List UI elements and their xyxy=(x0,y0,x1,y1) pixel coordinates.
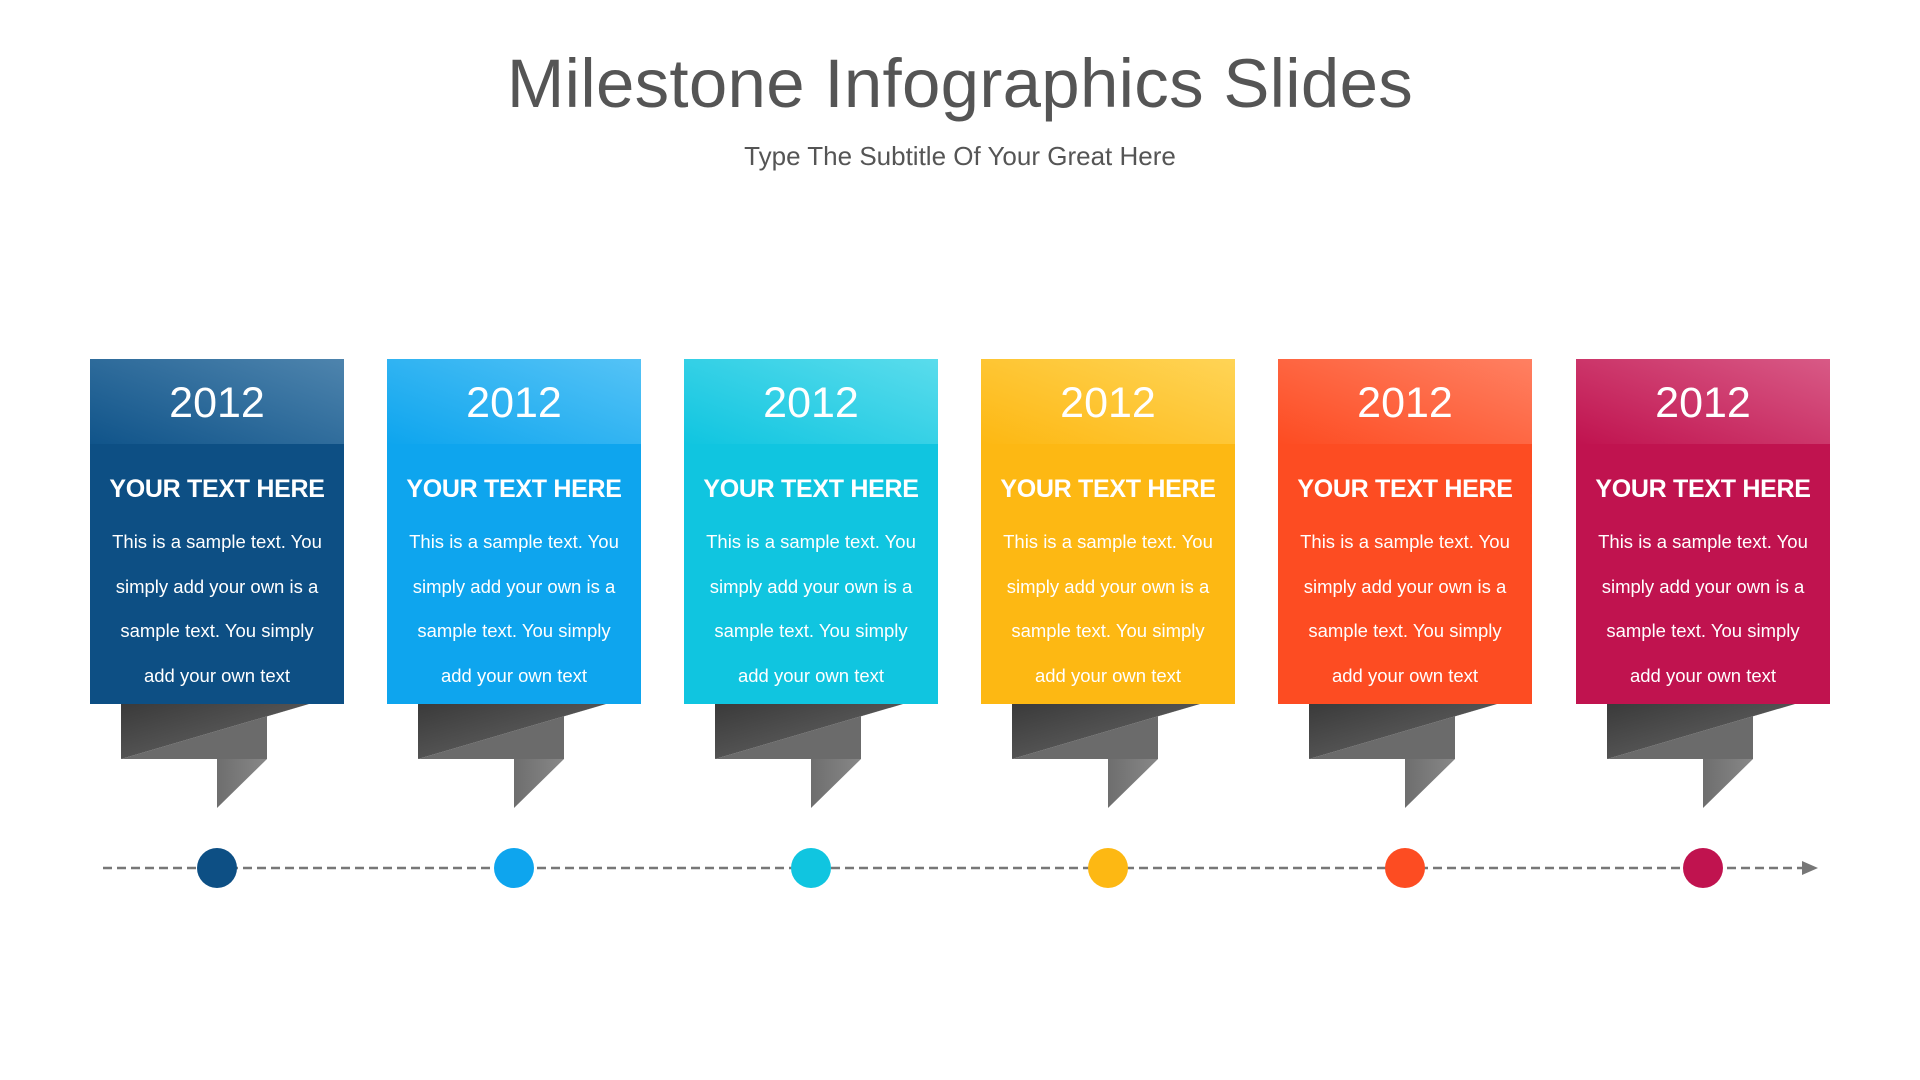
card 2 xyxy=(387,359,641,704)
card 6 xyxy=(1576,359,1830,704)
card 1 xyxy=(90,359,344,704)
card 5: simply add your own is a xyxy=(1304,576,1506,597)
subtitle: Type The Subtitle Of Your Great Here xyxy=(744,141,1176,171)
card 5: 2012 xyxy=(1357,379,1453,427)
card 3: add your own text xyxy=(738,665,884,686)
card 5: YOUR TEXT HERE xyxy=(1297,475,1513,503)
card 3: 2012 xyxy=(763,379,859,427)
card 1: YOUR TEXT HERE xyxy=(109,475,325,503)
card 1: sample text. You simply xyxy=(120,620,314,641)
card 2: sample text. You simply xyxy=(417,620,611,641)
card 4: 2012 xyxy=(1060,379,1156,427)
card 2: simply add your own is a xyxy=(413,576,615,597)
card 5: add your own text xyxy=(1332,665,1478,686)
card 6: YOUR TEXT HERE xyxy=(1595,475,1811,503)
card 3: simply add your own is a xyxy=(710,576,912,597)
card 3: sample text. You simply xyxy=(714,620,908,641)
card 6: This is a sample text. You xyxy=(1598,531,1808,552)
card 4 xyxy=(981,359,1235,704)
card 2: 2012 xyxy=(466,379,562,427)
card 4: add your own text xyxy=(1035,665,1181,686)
card 2: YOUR TEXT HERE xyxy=(406,475,622,503)
title: Milestone Infographics Slides xyxy=(507,45,1413,122)
card 5: This is a sample text. You xyxy=(1300,531,1510,552)
card 6: add your own text xyxy=(1630,665,1776,686)
card 4: simply add your own is a xyxy=(1007,576,1209,597)
card 1: simply add your own is a xyxy=(116,576,318,597)
card 4: sample text. You simply xyxy=(1011,620,1205,641)
card 3: YOUR TEXT HERE xyxy=(703,475,919,503)
card 1: This is a sample text. You xyxy=(112,531,322,552)
card 6: 2012 xyxy=(1655,379,1751,427)
card 5: sample text. You simply xyxy=(1308,620,1502,641)
card 4: This is a sample text. You xyxy=(1003,531,1213,552)
card 3 xyxy=(684,359,938,704)
card 5 xyxy=(1278,359,1532,704)
card 4: YOUR TEXT HERE xyxy=(1000,475,1216,503)
card 6: sample text. You simply xyxy=(1606,620,1800,641)
card 2: add your own text xyxy=(441,665,587,686)
card 6: simply add your own is a xyxy=(1602,576,1804,597)
card 2: This is a sample text. You xyxy=(409,531,619,552)
card 3: This is a sample text. You xyxy=(706,531,916,552)
card 1: 2012 xyxy=(169,379,265,427)
card 1: add your own text xyxy=(144,665,290,686)
